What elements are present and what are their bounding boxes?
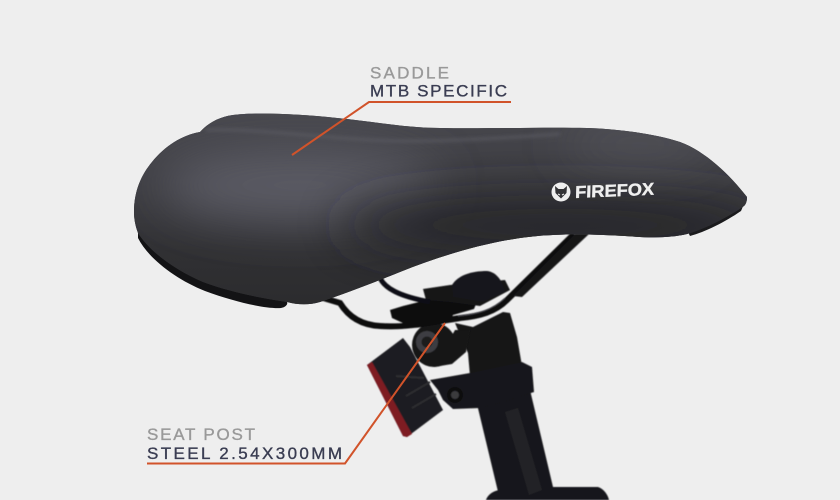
back rail [380, 278, 430, 302]
callout value: STEEL 2.54X300MM [147, 444, 342, 463]
leader line [147, 323, 445, 464]
lower bracket [486, 487, 609, 500]
callout: seat post [147, 323, 445, 464]
rear reflector light [367, 338, 443, 437]
saddle underside pan [138, 225, 287, 308]
light ribs [396, 376, 436, 408]
seat post and bracket [430, 312, 609, 500]
callout label: SADDLE [370, 64, 449, 82]
post neck and head [455, 312, 522, 376]
brand logo: Firefox: FIREFOX [575, 180, 655, 202]
saddle body [134, 114, 747, 304]
clamp knob [452, 271, 505, 302]
icon: fox head [552, 182, 570, 202]
callout label: SEAT POST [147, 425, 255, 444]
callout value: MTB SPECIFIC [370, 82, 507, 100]
seat clamp and rails [320, 234, 589, 367]
collar screw [447, 387, 463, 403]
post collar [430, 362, 534, 409]
saddle shading [134, 114, 747, 304]
clamp upper plate [423, 280, 510, 306]
post tube [477, 390, 561, 500]
clamp lower plate [390, 292, 476, 324]
leader line [292, 102, 511, 155]
infographic: saddle and seat post [134, 66, 747, 500]
front rail [320, 234, 574, 326]
clamp bolt body [412, 323, 456, 367]
callout: saddle [292, 64, 511, 155]
saddle [134, 114, 747, 308]
